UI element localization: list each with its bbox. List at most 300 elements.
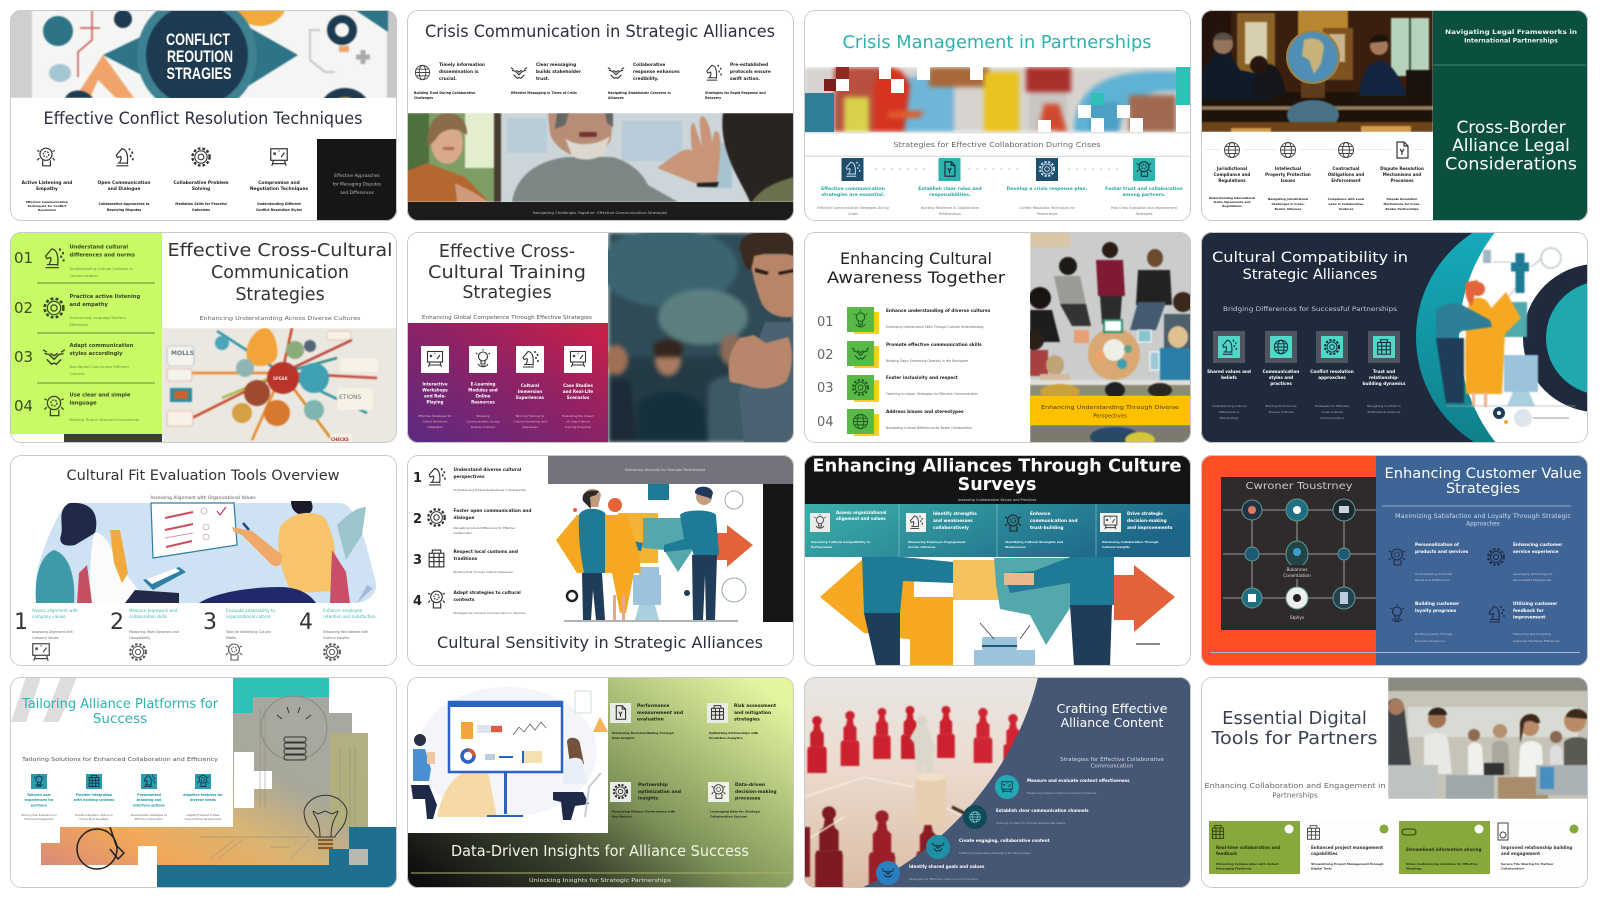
subtitle: Enhancing Understanding Across Diverse Cultures (200, 316, 361, 322)
image: pointing man photo (608, 232, 794, 443)
item: partnership optimization (610, 782, 681, 818)
heading: Essential Digital (1222, 708, 1367, 729)
item: active listening: Active Listening and (22, 180, 72, 186)
image: tense meeting photo (408, 113, 793, 202)
panel: gradient strip (407, 323, 608, 443)
subtitle: Unlocking Insights for Strategic Partnerships (529, 878, 672, 884)
item 04: Address biases and stereotypes (886, 409, 964, 415)
image: conflict resolution illustration (10, 10, 397, 98)
item: customer feedback: Customer Feedback Effectively (1513, 639, 1560, 643)
item: data-driven decisions: Collaboration Success (710, 814, 747, 818)
item: tailored experiences: Tailoring User Experience for (21, 813, 58, 817)
item: loyalty programs: Exceptional Service (1415, 639, 1445, 643)
item: drive strategic decision-making: Drive strategic (1127, 511, 1164, 517)
item: jurisdictional compliance: Regulations (1222, 204, 1242, 208)
item: customer service: Personalized Experiences (1513, 578, 1552, 582)
item: compromise and negotiation: Negotiation Techniques (250, 186, 309, 192)
item: trust and relationship: relationship- (1369, 375, 1399, 380)
item 3 (203, 608, 275, 660)
item: shared values (1207, 331, 1251, 420)
item 02: Bridging Gaps: Embracing Diversity in the Workplace (886, 359, 968, 363)
item 2: collaboration skills (129, 614, 167, 619)
item 1: Understand diverse cultural (454, 467, 522, 473)
item 1: Company Values (32, 636, 59, 640)
panel: Cross-Border Alliance Legal Considerations (1201, 10, 1588, 221)
header: Assessing Collaborative Values and Practices (958, 498, 1037, 502)
item: cultural immersion: Awareness (522, 425, 538, 429)
heading: Effective Cross- (439, 242, 575, 262)
item: risk assessment: Risk assessment (734, 703, 777, 709)
item: customer service: Enhancing customer (1513, 542, 1563, 548)
item: engaging content: Crafting Collaborative Messaging for Partnerships (959, 851, 1031, 855)
item: crisis response plan: Develop a crisis response plan. (1007, 186, 1088, 192)
item: clear roles: responsibilities. (929, 192, 971, 198)
item 02: Practice active listening (70, 294, 140, 300)
item 03 (14, 343, 134, 376)
item: dispute resolution: Mechanisms and (1383, 172, 1421, 177)
item: pre-established protocols: protocols ensure (730, 69, 771, 75)
image: mind map: CHECKS (331, 437, 349, 442)
item 2 (413, 508, 531, 535)
item: identify strengths: Measuring Employee Engagement (908, 540, 966, 544)
item 1 (14, 608, 78, 661)
item: crisis response plan: Conflict Resolution Techniques for (1019, 206, 1076, 210)
panel: green sidebar: Cross-Border (1456, 118, 1566, 138)
callout: black panel: for Managing Disputes (333, 182, 382, 188)
item: interactive workshops: Effective Strategies for (418, 414, 452, 418)
item 1: 1 (413, 471, 422, 486)
item: flexible integration: Ensure Business Needs (79, 817, 109, 821)
item: tailored experiences: experiences for (25, 798, 54, 802)
item 01: Understanding Cultural Contexts in (70, 267, 133, 271)
item: partnership optimization: Key Metrics (612, 814, 632, 818)
item: tailored experiences: Enhanced Engagement (24, 817, 54, 821)
item: timely information (414, 62, 485, 100)
footer bar: Navigating Challenges Together: Effective Communication Strategies (533, 210, 667, 215)
item: communication styles: Building Trust Across (1265, 404, 1297, 408)
image: customer journey board (1221, 477, 1376, 630)
item: personalization: Personalization of (1415, 542, 1459, 548)
item: real-time collaboration: feedback (1216, 851, 1237, 856)
item: project management: Digital Tools (1311, 866, 1332, 870)
item 01 (817, 307, 991, 334)
header: Surveys (958, 475, 1036, 495)
item: communication styles: styles and (1269, 375, 1293, 380)
heading: Strategies (235, 285, 325, 305)
item 02: 02 (817, 348, 834, 363)
item 4: Cultural Insights (323, 636, 349, 640)
item: conflict resolution: approaches (1318, 375, 1346, 380)
item: case studies: of Cross-Cultural (566, 420, 590, 424)
item 4: 4 (299, 610, 313, 635)
heading: Data-Driven Insights for Alliance Success (451, 842, 749, 860)
item: intellectual property: Property Protection (1265, 172, 1311, 177)
item: dispute resolution: Mechanisms for Cross- (1384, 202, 1421, 206)
heading: Alliance Content (1061, 715, 1163, 730)
image: collaboration figures mosaic (805, 67, 1190, 132)
item: engaging content (926, 835, 1050, 859)
item: shared values: Partnerships (1220, 416, 1239, 420)
item 03: 03 (14, 348, 33, 366)
item: dispute resolution: Processes (1390, 178, 1414, 183)
item: relationship building: Collaboration (1501, 866, 1524, 870)
item: risk assessment: and mitigation (734, 710, 771, 716)
item: active listening: Empathy (36, 186, 58, 192)
heading: Cultural Sensitivity in Strategic Alliances (437, 633, 763, 652)
item: flexible integration: Flexible integration (76, 793, 113, 797)
item: collaborative problem solving: Mediation Skills for Peaceful (175, 202, 227, 206)
item 04 (14, 392, 139, 422)
band: four survey items (804, 504, 1191, 557)
header: Enhancing Alliances Through Culture (812, 456, 1182, 476)
item: trust and relationship: Trust and (1373, 369, 1395, 374)
item 3: traditions (454, 556, 478, 562)
item: risk assessment: strategies (734, 716, 760, 722)
item: personalization (1389, 542, 1469, 582)
item: e-learning: Online (476, 394, 491, 398)
item: cultural immersion: Cultural (521, 383, 540, 388)
callout: black panel: and Differences (340, 190, 375, 196)
item: loyalty programs: Building customer (1415, 601, 1460, 607)
item 01: 01 (817, 315, 834, 330)
item 03: 03 (817, 381, 834, 396)
item: timely information: Challenges (414, 96, 433, 100)
item: jurisdictional compliance (1209, 138, 1255, 208)
item: conflict resolution: Conflict resolution (1310, 369, 1354, 374)
item: clear messaging: Clear messaging (536, 62, 576, 68)
item: compromise and negotiation: Conflict Resolution Styles (256, 208, 302, 212)
item 2: Navigating Cultural Differences for Effective (454, 526, 515, 530)
item: customer service (1488, 542, 1563, 582)
item: collaborative response: Navigating Stakeholder Concerns in (608, 91, 671, 95)
subtitle: Communication (1091, 764, 1133, 770)
panel: Enhancing Alliances Through Culture Surveys (804, 455, 1191, 666)
item 01: Enhance understanding of diverse cultures (886, 308, 991, 314)
item: effective communication (817, 158, 889, 216)
item: flexible integration (74, 774, 114, 821)
image: customer journey board: Conentiation (1283, 573, 1311, 579)
item 04: language (70, 400, 97, 406)
illustration: handshake close-up (804, 555, 1191, 666)
item 1 (413, 467, 526, 492)
item: enhance communication: Enhance (1030, 511, 1051, 517)
item: clear channels: Tailoring Content for Diverse Stakeholder Needs (995, 821, 1066, 825)
heading (168, 241, 392, 305)
item: intellectual property: Challenges in Cross- (1271, 202, 1305, 206)
item: active listening: Effective Communication (26, 200, 68, 204)
item: data-driven decisions: processes (735, 796, 761, 802)
item: measure content (995, 775, 1130, 799)
item: collaborative problem solving: Outcomes (192, 208, 210, 212)
top bar (548, 455, 794, 484)
item: collaborative problem solving: Collaborative Problem (173, 180, 229, 186)
item: timely information: crucial. (439, 76, 457, 82)
item: contractual obligations: Contractual (1333, 166, 1360, 171)
item: contractual obligations: Compliance with Local (1328, 197, 1364, 201)
item: open communication: Open Communication (98, 180, 150, 186)
item: measure content: Measure and evaluate content effectiveness (1027, 778, 1130, 783)
item: case studies: Evaluating the Impact (562, 414, 595, 418)
item: engaging content: Create engaging, collaborative content (959, 838, 1050, 843)
item: data-driven decisions: Leveraging Data for Strategic (710, 810, 761, 814)
item: tailored experiences: Tailored user (27, 793, 51, 797)
item: customer feedback: Utilizing customer (1513, 601, 1558, 607)
panel: Crisis Communication in Strategic Alliances (407, 10, 794, 221)
subtitle: Tailoring Solutions for Enhanced Collaboration and Efficiency (21, 757, 219, 763)
heading (827, 249, 1005, 287)
item: project management (1305, 821, 1395, 874)
item: e-learning: Stressing (476, 414, 490, 418)
panel: green sidebar: International Partnerships (1464, 38, 1558, 44)
item 2: Compatibility (129, 636, 150, 640)
image: boardroom with globe (1201, 10, 1433, 132)
item 03: styles accordingly (70, 351, 123, 357)
item: real-time collaboration: Real-time collaboration and (1216, 845, 1280, 850)
panel: Effective Cross-Cultural Communication Strategies (10, 232, 397, 443)
top bar: Embracing Diversity for Stronger Partnerships (625, 468, 705, 472)
panel: white content block (10, 677, 233, 827)
item: compromise and negotiation (250, 149, 309, 212)
heading (21, 696, 218, 727)
item: trust and collaboration: Strategies (1136, 212, 1153, 216)
subtitle (1204, 781, 1386, 800)
item 03: Foster inclusivity and respect (886, 375, 958, 381)
heading: Strategies (1446, 481, 1520, 497)
item: performance measurement: Enhancing Decision-Making Through (612, 731, 674, 735)
panel: green sidebar (1433, 10, 1588, 221)
item: interactive workshops: Workshops (422, 388, 448, 392)
item: real-time collaboration: Messaging Platforms (1216, 866, 1252, 870)
item: risk assessment (707, 703, 777, 740)
item: measure content: Measuring Impact of Alliance Content Initiatives (1027, 791, 1097, 795)
subtitle: Partnerships (1272, 790, 1318, 800)
heading: Effective Cross-Cultural (168, 241, 392, 261)
item: pre-established protocols (705, 62, 771, 100)
heading: Strategies (462, 283, 552, 303)
item: open communication: and Dialogue (108, 186, 140, 192)
item 04: 04 (817, 415, 834, 430)
item: tailored experiences: partners (31, 804, 47, 808)
item: trust and relationship: Navigating Conflicts in (1367, 404, 1401, 408)
item: pre-established protocols: Strategies for Rapid Response and (705, 91, 766, 95)
item: intellectual property: Navigating Jurisdictional (1268, 197, 1308, 201)
item: shared goals: Identify shared goals and values (909, 864, 985, 869)
item 4 (413, 590, 526, 615)
item: cultural immersion: Tailoring Training for (514, 414, 545, 418)
item: jurisdictional compliance: Jurisdictional (1216, 166, 1248, 171)
item: shared values: beliefs (1221, 375, 1237, 380)
item: personalized branding: Personalized (137, 793, 162, 797)
item 02: Promote effective communication skills (886, 342, 982, 348)
item: data-driven decisions (708, 782, 777, 818)
header (804, 455, 1191, 504)
item: shared values: Understanding Cultural (1212, 404, 1247, 408)
image: mind map: MOLLS (171, 350, 194, 357)
item 1: Assess alignment with (32, 608, 78, 613)
item 3: Tools for Identifying Cultural (225, 630, 271, 634)
item: clear roles: Establish clear roles and (918, 186, 982, 192)
item: pre-established protocols: swift action. (730, 76, 760, 82)
item: performance measurement: evaluation (637, 716, 664, 722)
item: interactive workshops: and Role- (424, 394, 446, 398)
item: contractual obligations: Ventures (1339, 207, 1354, 211)
item: assess organizational alignment: Partnerships (811, 545, 833, 549)
subtitle: Strategies for Effective Collaborative (1060, 757, 1165, 763)
item 03: Adapt communication (70, 343, 134, 349)
item: clear channels (963, 805, 1089, 829)
panel: Effective Conflict Resolution Techniques (10, 10, 397, 221)
panel: lime sidebar (10, 232, 162, 443)
item: intellectual property: Border Alliances (1275, 207, 1302, 211)
image: conflict resolution illustration: CONFLICT (166, 31, 230, 49)
item: shared values: Shared values and (1207, 369, 1251, 374)
heading: Tailoring Alliance Platforms for (21, 696, 218, 712)
item: cultural immersion (513, 346, 547, 429)
item: case studies: Scenarios (567, 395, 590, 400)
item 02 (817, 341, 982, 368)
item: partnership optimization: Measuring Alliance Performance with (612, 810, 675, 814)
item: adaptive features (183, 774, 223, 821)
heading: Crisis Management in Partnerships (842, 32, 1152, 53)
image: mind map: ETIONS (339, 394, 361, 401)
item: e-learning (466, 346, 500, 429)
item: interactive workshops: Global Workforce (423, 420, 448, 424)
panel: green sidebar: Alliance Legal (1452, 136, 1570, 156)
item 03 (817, 375, 978, 402)
item 2: 2 (413, 512, 422, 527)
item: timely information: Building Trust During Collaborative (414, 91, 475, 95)
item: assess organizational alignment: Assess organizational (836, 510, 887, 515)
item 2: Collaboration (454, 531, 472, 535)
item: customer feedback: Measuring and Analyzing (1513, 632, 1551, 636)
item 01: Understand cultural (70, 244, 128, 250)
item: personalized branding: Effective Collaboration (135, 817, 164, 821)
heading: Strategic Alliances (1243, 267, 1377, 283)
item 4: Adapt strategies to cultural (454, 590, 521, 596)
item: jurisdictional compliance: Compliance and (1214, 172, 1250, 177)
panel: green sidebar: Considerations (1445, 154, 1577, 174)
item: case studies: and Real-Life (563, 389, 593, 394)
item 04: Navigating Cultural Differences for Better Collaboration (886, 426, 972, 430)
item: customer feedback: feedback for (1513, 608, 1544, 614)
item: trust and relationship: building dynamics (1362, 381, 1406, 386)
item 1: company values (32, 614, 65, 619)
item: clear channels: Establish clear communication channels (996, 808, 1089, 813)
item 3: Evaluate adaptability to (226, 608, 275, 613)
item 1: 1 (14, 610, 28, 635)
item: performance measurement: Performance (637, 703, 670, 709)
subtitle: Assessing Alignment with Organizational Values (150, 495, 256, 501)
item: adaptive features: diverse needs (190, 798, 216, 802)
heading: Awareness Together (827, 268, 1005, 287)
item: adaptive features: Adaptive features for (183, 793, 223, 797)
subtitle: Enhancing Collaboration and Engagement in (1204, 781, 1386, 790)
heading: Success (93, 711, 147, 727)
item: trust and relationship (1362, 331, 1406, 414)
item: interactive workshops: Interactive (422, 382, 448, 386)
item: active listening: Resolution (38, 208, 56, 212)
item: relationship building: and engagement (1501, 851, 1540, 856)
item: enhance communication: Identifying Cultural Strengths and (1005, 540, 1063, 544)
item: partnership optimization: insights (638, 796, 659, 802)
item 2: Measuring Team Dynamics and (129, 630, 179, 634)
item: contractual obligations: Enforcement (1331, 178, 1361, 183)
item: contractual obligations (1328, 138, 1364, 211)
item: trust and collaboration: among partners. (1122, 192, 1166, 198)
item: real-time collaboration (1209, 821, 1300, 874)
heading: Cultural Training (428, 263, 586, 283)
item: performance measurement: Data Insights (612, 736, 635, 740)
item 02 (14, 294, 140, 327)
item: customer service: Leveraging Technology for (1513, 572, 1553, 576)
item: flexible integration: with existing systems (74, 798, 114, 802)
item: shared values: Differences in (1219, 410, 1239, 414)
panel: Cultural Compatibility in Strategic Alliances (1201, 232, 1588, 443)
item: interactive workshops: Integration (427, 425, 443, 429)
item: real-time collaboration: Enhancing Collaboration with Instant (1216, 862, 1279, 866)
item: identify strengths: collaboratively (933, 525, 969, 531)
item 01: Communication (70, 274, 98, 278)
image: red pawns photo (796, 677, 1044, 888)
heading (1384, 466, 1582, 497)
panel: green sidebar: Navigating Legal Frameworks in (1445, 29, 1577, 36)
item: active listening: Techniques for Conflict (28, 204, 67, 208)
item 4: contexts (454, 597, 475, 603)
item: trust and collaboration: Foster trust and collaboration (1105, 186, 1183, 192)
item: collaborative problem solving: Solving (192, 186, 210, 192)
item 01: 01 (14, 249, 33, 267)
item: shared goals: Strategies for Effective Alliance Communication (909, 877, 978, 881)
item: project management: Streamlining Project Management through (1311, 862, 1384, 866)
item: enhance communication: Weaknesses (1005, 545, 1026, 549)
panel: Cultural Fit Evaluation Tools Overview (10, 455, 397, 666)
item: clear messaging: Effective Messaging in Times of Crisis (511, 91, 577, 95)
item: relationship building: Improved relationship building (1501, 845, 1572, 850)
image: conflict resolution illustration: REOUTION (167, 48, 233, 66)
item 01: Enhancing Interpersonal Skills Through Cultural Understanding (886, 325, 984, 329)
item: risk assessment: Predictive Analytics (709, 736, 743, 740)
item: conflict resolution: Strategies for Effective (1315, 404, 1349, 408)
item 4: Enhance employee (323, 608, 363, 613)
image: group circle photo: Perspectives (1093, 414, 1127, 420)
subtitle: Strategies for Effective Collaboration During Crises (894, 141, 1101, 149)
item: crisis response plan (1007, 158, 1088, 216)
item: effective communication: Effective communication (821, 186, 885, 192)
item: contractual obligations: Obligations and (1328, 172, 1364, 177)
subtitle: Bridging Differences for Successful Partnerships (1223, 306, 1397, 313)
item: case studies (562, 346, 595, 429)
item: clear roles: Relationships (939, 212, 961, 216)
panel: Enhancing Cultural Awareness Together (804, 232, 1191, 443)
item 4: 4 (413, 594, 422, 609)
item: customer feedback (1489, 601, 1560, 643)
item: information sharing: Meetings (1406, 866, 1422, 870)
item: drive strategic decision-making: and improvements (1127, 525, 1173, 531)
item: dispute resolution: Border Partnerships (1386, 207, 1419, 211)
panel: Crisis Management in Partnerships (804, 10, 1191, 221)
item: clear roles (918, 158, 982, 216)
item 4 (299, 608, 376, 660)
panel: Essential Digital Tools for Partners (1201, 677, 1588, 888)
item: e-learning: Modules and (468, 388, 498, 392)
image: customer journey board: Cwroner Toustrney (1246, 481, 1353, 492)
item: cultural immersion: Cultural Sensitivity and (513, 420, 547, 424)
heading: Cultural Compatibility in (1212, 250, 1408, 266)
item: assess organizational alignment: alignment and values (836, 516, 886, 521)
item: jurisdictional compliance: Understanding International (1209, 196, 1255, 200)
item: open communication (98, 148, 150, 212)
item: enhance communication: communication and (1030, 518, 1078, 524)
